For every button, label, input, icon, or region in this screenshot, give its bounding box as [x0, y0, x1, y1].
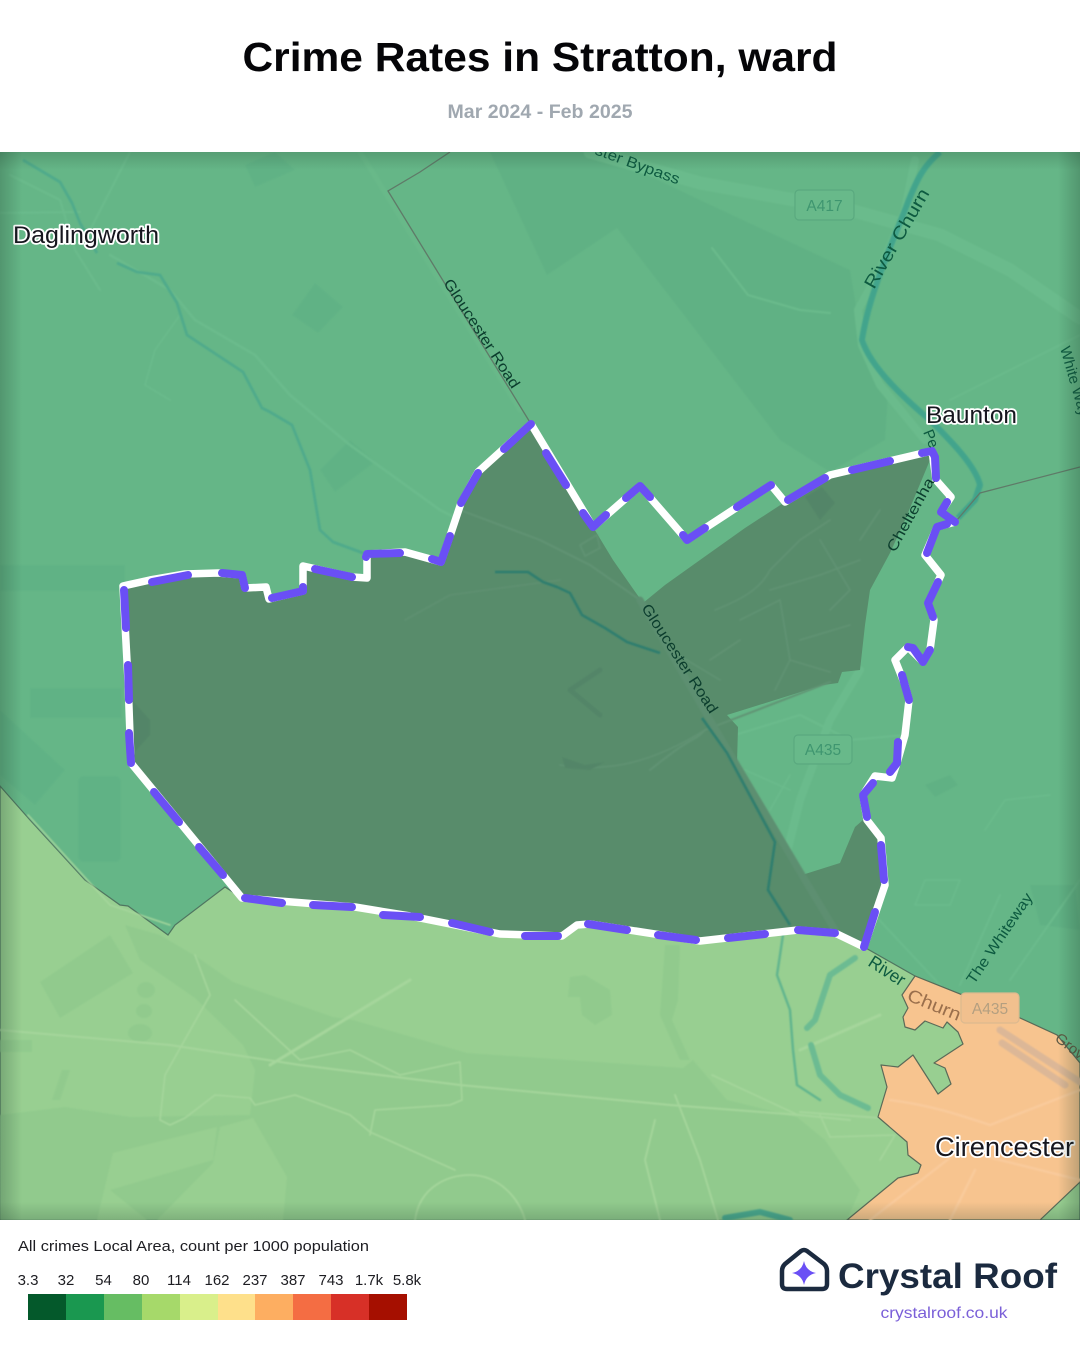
- map: [0, 142, 1080, 1220]
- website url: crystalroof.co.uk: [880, 1305, 1009, 1322]
- title: Crime Rates in Stratton, ward: [242, 34, 838, 80]
- place label: Cirencester: Cirencester: [935, 1132, 1074, 1162]
- road label: Gloucester Road upper: Gloucester Road: [440, 276, 523, 392]
- logo: Crystal Roof: [782, 1250, 1057, 1322]
- ward boundary: purple dashes: [124, 424, 955, 947]
- stream: inside ward: [495, 572, 790, 925]
- road label: The Whiteway: The Whiteway: [963, 889, 1037, 987]
- road shield: A435 lower: A435: [972, 1001, 1008, 1018]
- legend title: All crimes Local Area, count per 1000 population: [18, 1238, 369, 1255]
- wordmark: Crystal Roof: [838, 1257, 1057, 1296]
- road shield: A417: A417: [806, 198, 843, 215]
- lower zone water channels: [725, 935, 868, 1220]
- legend tick labels: 32: [58, 1272, 74, 1289]
- river label: River Churn upper: River Churn: [860, 185, 933, 292]
- road label: Bypass: ster Bypass: [593, 142, 682, 188]
- river label: Churn lower: Churn: [905, 985, 964, 1025]
- ward zone darker patches: [565, 764, 596, 769]
- river: upper Churn: [862, 152, 980, 518]
- legend tick labels: 743: [318, 1272, 344, 1289]
- legend tick labels: 3.3: [18, 1272, 38, 1289]
- legend tick labels: 162: [204, 1272, 230, 1289]
- lower zone lighter patches: [97, 1220, 283, 1221]
- place label: Baunton: Baunton: [926, 402, 1017, 429]
- lower zone roads: [0, 815, 915, 1220]
- legend tick labels: 387: [280, 1272, 306, 1289]
- orange zone details: [870, 1030, 1080, 1220]
- road shield: A435 lower: [961, 993, 1019, 1023]
- subtitle: date range: Mar 2024 - Feb 2025: [448, 102, 633, 123]
- legend tick labels: 54: [95, 1272, 112, 1289]
- ward boundary: white line: [123, 424, 955, 947]
- river label: River lower: River: [865, 952, 909, 990]
- legend colour scale: [28, 1294, 407, 1320]
- road shield: A435 upper: A435: [805, 742, 841, 759]
- upper zone roads: [348, 152, 1066, 925]
- place label: Daglingworth: Daglingworth: [13, 222, 159, 249]
- lower zone terrain patches: [0, 1040, 1, 1052]
- zone: base upper green: [0, 152, 1080, 1062]
- lower zone darker band: [0, 1114, 846, 1220]
- legend tick labels: 114: [167, 1272, 191, 1289]
- road label: Road fragment: Pe: [919, 427, 942, 451]
- admin boundary lines: [388, 152, 1080, 520]
- ward zone details: [598, 534, 827, 875]
- legend: [18, 1238, 422, 1320]
- road shield: A417: [795, 190, 854, 220]
- zone: orange Cirencester: [847, 976, 1080, 1220]
- road label: Cheltenham Road: Cheltenha: [884, 474, 939, 555]
- map edge vignette: [0, 152, 1080, 1220]
- icon: purple star: [792, 1261, 816, 1285]
- legend tick labels: 237: [242, 1272, 268, 1289]
- road label: Gloucester Road lower: Gloucester Road: [638, 601, 721, 717]
- zone: lower light green: [0, 786, 1080, 1220]
- upper zone terrain patches: [0, 152, 1080, 930]
- legend tick labels: 5.8k: [393, 1272, 422, 1289]
- icon: house outline: [782, 1250, 827, 1289]
- road shield: A435 upper: [794, 735, 852, 764]
- legend tick labels: [18, 1272, 422, 1289]
- legend tick labels: 80: [133, 1272, 149, 1289]
- legend tick labels: 1.7k: [355, 1272, 384, 1289]
- ward zone: dark fill: [123, 424, 932, 947]
- stream: Daglingworth brook: [23, 160, 363, 553]
